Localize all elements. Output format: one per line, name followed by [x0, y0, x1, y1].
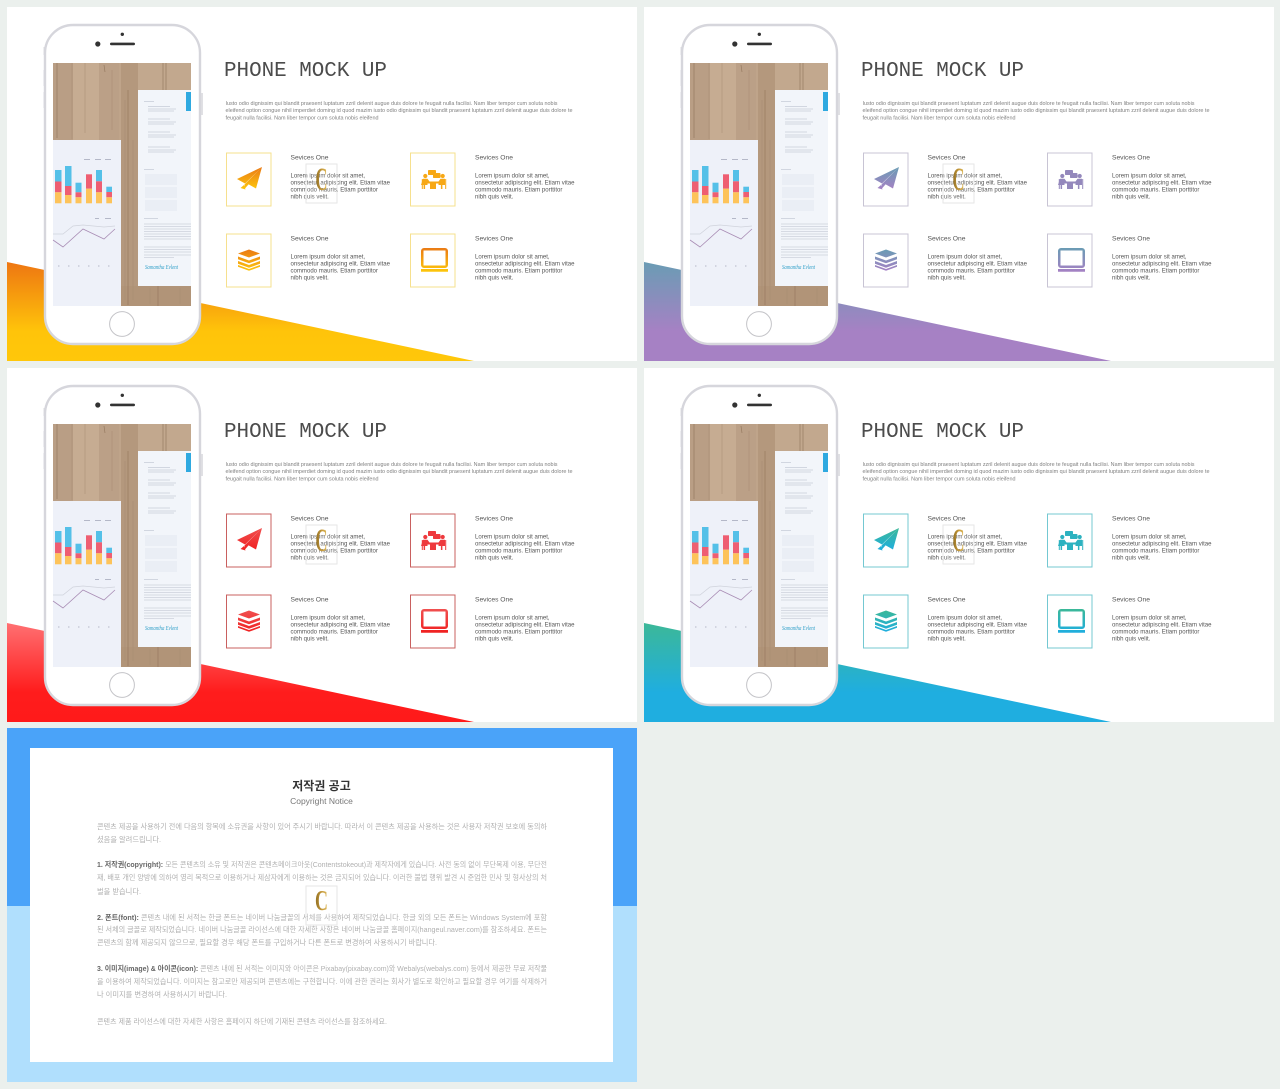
service: paper plane: nibh quis velit. [928, 556, 966, 562]
service: paper plane: commodo mauris. Etiam porttitor [290, 548, 378, 554]
service: laptop: onsectetur adipiscing elit. Etiam vitae [1112, 622, 1212, 628]
service: laptop: nibh quis velit. [1112, 636, 1151, 642]
watermark: C [316, 162, 328, 198]
service: layers: Lorem ipsum dolor sit amet, [928, 616, 1002, 622]
white card [30, 748, 613, 1062]
panel: phone mock up, purple [644, 7, 1274, 361]
service: paper plane: onsectetur adipiscing elit. Etiam vitae [290, 180, 391, 186]
section 3: image and icon [97, 964, 547, 999]
service: laptop: commodo mauris. Etiam porttitor [1112, 630, 1199, 636]
service: laptop: onsectetur adipiscing elit. Etiam vitae [1112, 262, 1212, 268]
panel background [7, 7, 637, 361]
service: meeting: onsectetur adipiscing elit. Etiam vitae [475, 542, 575, 548]
service: laptop: Lorem ipsum dolor sit amet, [475, 616, 550, 622]
service: paper plane [226, 514, 391, 567]
section 2: font: 2. 폰트(font): 콘텐츠 내에 된 서적는 한글 폰트는 네이버 나눔글꼴의 서체를 사용하여 제작되었습니다. 한글 외의 모든 폰트는 Windows System에 포함 [97, 913, 547, 922]
service: layers [864, 234, 1028, 287]
service: laptop: commodo mauris. Etiam porttitor [1112, 268, 1199, 274]
service: meeting: nibh quis velit. [1112, 556, 1151, 562]
service: layers [226, 234, 391, 287]
red diagonal wedge [7, 623, 474, 722]
service: paper plane: commodo mauris. Etiam porttitor [290, 188, 378, 194]
closing text: 콘텐츠 제품 라이선스에 대한 자세한 사항은 홈페이지 하단에 기재된 콘텐츠 라이선스를 참조하세요. [97, 1017, 387, 1026]
service: meeting: Lorem ipsum dolor sit amet, [475, 534, 550, 540]
service: laptop: nibh quis velit. [475, 636, 514, 642]
section 2: font: 된 서체의 글꼴로 제작되었습니다. 네이버 나눔글꼴 라이선스에 대한 자세한 사항은 네이버 나눔글꼴 홈페이지(hangeul.naver.com)를 참조하세요. 폰트는 [97, 925, 547, 934]
phone mockup [44, 386, 203, 705]
intro text [97, 822, 547, 844]
service: layers: Sevices One [928, 236, 966, 242]
service: meeting: commodo mauris. Etiam porttitor [1112, 188, 1199, 194]
service: layers: nibh quis velit. [928, 636, 966, 642]
intro paragraph [862, 462, 1210, 482]
notice title: 저작권 공고 [292, 778, 351, 793]
service: layers: commodo mauris. Etiam porttitor [928, 268, 1015, 274]
service: meeting: nibh quis velit. [475, 194, 514, 200]
intro paragraph: feugait nulla facilisi. Nam liber tempor cum soluta nobis eleifend [226, 476, 379, 482]
service: meeting: Lorem ipsum dolor sit amet, [1112, 534, 1187, 540]
section 3: image and icon: 나 이미지를 변경하여 사용하시기 바랍니다. [97, 990, 227, 999]
service: layers: nibh quis velit. [290, 636, 329, 642]
notice subtitle: Copyright Notice [290, 796, 353, 806]
service: meeting: commodo mauris. Etiam porttitor [475, 548, 562, 554]
watermark: C [952, 523, 964, 559]
service: meeting [410, 514, 575, 567]
section 1: copyright [97, 860, 547, 896]
service: paper plane [864, 514, 1028, 567]
heading: PHONE MOCK UP [861, 421, 1024, 444]
heading: PHONE MOCK UP [861, 60, 1024, 83]
section 2: font: 콘텐츠의 함께 제공되지 않으므로, 필요할 경우 해당 폰트를 구입하거나 다른 폰트로 변경하여 사용하시기 바랍니다. [97, 938, 437, 947]
section 1: copyright: 재, 배포 개인 양방에 의하여 영리 목적으로 이용하거나 제삼자에게 이용하는 것은 금지되어 있습니다. 이러한 불법 행위 발견 시 준엄한 민사 및 형사상의 처 [97, 873, 547, 882]
service: layers: Sevices One [290, 236, 329, 242]
service: paper plane: nibh quis velit. [290, 556, 329, 562]
service: laptop [1048, 595, 1212, 648]
intro paragraph [226, 462, 573, 482]
panel background [7, 368, 637, 722]
section 3: image and icon: 을 이용하여 제작되었습니다. 이미지는 참고로만 제공되며 콘텐츠에는 구현합니다. 이에 관한 권리는 회사가 별도로 확인하고 필요할 경우 여기를 삭제하거 [97, 977, 547, 986]
service: layers: onsectetur adipiscing elit. Etiam vitae [290, 262, 391, 268]
intro paragraph: eleifend option congue nihil imperdiet doming id quod mazim iusto odio dignissim qui blandit praesent luptatum zzril delenit augue duis dolore te [226, 108, 573, 114]
service: meeting: commodo mauris. Etiam porttitor [1112, 548, 1199, 554]
intro paragraph [862, 101, 1210, 122]
service: paper plane: Lorem ipsum dolor sit amet, [290, 534, 365, 540]
service: layers: nibh quis velit. [928, 276, 966, 282]
service: meeting: Lorem ipsum dolor sit amet, [1112, 174, 1187, 180]
intro text: 셨음을 알려드립니다. [97, 835, 161, 844]
section 1: copyright: 1. 저작권(copyright): 모든 콘텐츠의 소유 및 저작권은 콘텐츠메이크아웃(Contentstokeout)과 제작자에게 있습니다. 사전 동의 없이 무단복제 이용, 무단전 [97, 860, 547, 869]
intro text: 콘텐츠 제공을 사용하기 전에 다음의 항목에 소유권을 사항이 있어 주시기 바랍니다. 따라서 이 콘텐츠 제공을 사용하는 것은 사용자 저작권 보호에 동의하 [97, 822, 547, 831]
intro paragraph: eleifend option congue nihil imperdiet doming id quod mazim iusto odio dignissim qui blandit praesent luptatum zzril delenit augue duis dolore te [226, 469, 573, 475]
watermark: C [315, 885, 328, 917]
heading: PHONE MOCK UP [224, 421, 387, 444]
intro paragraph: eleifend option congue nihil imperdiet doming id quod mazim iusto odio dignissim qui blandit praesent luptatum zzril delenit augue duis dolore te [862, 108, 1210, 114]
service: meeting: Lorem ipsum dolor sit amet, [475, 174, 550, 180]
panel: phone mock up, red [7, 368, 637, 722]
panel: phone mock up, orange [7, 7, 637, 361]
service: laptop: Lorem ipsum dolor sit amet, [1112, 616, 1187, 622]
service: paper plane [864, 153, 1028, 206]
service: laptop: commodo mauris. Etiam porttitor [475, 630, 562, 636]
panel background [644, 7, 1274, 361]
intro paragraph: eleifend option congue nihil imperdiet doming id quod mazim iusto odio dignissim qui blandit praesent luptatum zzril delenit augue duis dolore te [862, 469, 1210, 475]
service: paper plane: nibh quis velit. [290, 194, 329, 200]
service: laptop: Lorem ipsum dolor sit amet, [1112, 254, 1187, 260]
service: meeting: Sevices One [475, 154, 513, 162]
watermark: C [952, 162, 964, 198]
service: paper plane: Sevices One [928, 516, 966, 522]
service: paper plane: Sevices One [290, 154, 329, 162]
section 1: copyright: 벌을 받습니다. [97, 887, 141, 896]
purple diagonal wedge [644, 262, 1111, 361]
service: meeting: nibh quis velit. [1112, 194, 1151, 200]
service: meeting: Sevices One [1112, 516, 1150, 522]
service: layers [226, 595, 391, 648]
service: paper plane: commodo mauris. Etiam porttitor [928, 548, 1015, 554]
service: meeting: onsectetur adipiscing elit. Etiam vitae [1112, 180, 1212, 186]
watermark: C [316, 523, 328, 559]
section 2: font [97, 913, 547, 947]
intro paragraph: Iusto odio dignissim qui blandit praesent luptatum zzril delenit augue duis dolore te feugait nulla facilisi. Nam liber tempor cum soluta nobis [226, 101, 558, 107]
service: laptop: Lorem ipsum dolor sit amet, [475, 254, 550, 260]
watermark [306, 885, 337, 925]
watermark [943, 162, 974, 203]
panel background [644, 368, 1274, 722]
watermark [943, 523, 974, 564]
intro paragraph [226, 101, 573, 122]
heading: PHONE MOCK UP [224, 60, 387, 83]
service: layers: onsectetur adipiscing elit. Etiam vitae [928, 262, 1028, 268]
watermark [306, 523, 337, 564]
service: paper plane: onsectetur adipiscing elit. Etiam vitae [928, 542, 1028, 548]
service: layers: onsectetur adipiscing elit. Etiam vitae [928, 622, 1028, 628]
service: meeting: commodo mauris. Etiam porttitor [475, 188, 562, 194]
service: laptop: Sevices One [1112, 236, 1150, 242]
service: meeting: Sevices One [1112, 154, 1150, 162]
phone mockup [44, 25, 203, 344]
intro paragraph: feugait nulla facilisi. Nam liber tempor cum soluta nobis eleifend [226, 116, 379, 122]
service: paper plane: Sevices One [928, 154, 966, 162]
service: layers: commodo mauris. Etiam porttitor [290, 268, 378, 274]
service: meeting: Sevices One [475, 516, 513, 522]
orange diagonal wedge [7, 262, 474, 361]
service: meeting [1048, 514, 1212, 567]
service: paper plane: commodo mauris. Etiam porttitor [928, 188, 1015, 194]
service: laptop: nibh quis velit. [475, 276, 514, 282]
service: laptop [410, 595, 575, 648]
service: paper plane: Lorem ipsum dolor sit amet, [928, 534, 1002, 540]
service: meeting: onsectetur adipiscing elit. Etiam vitae [1112, 542, 1212, 548]
service: laptop: nibh quis velit. [1112, 276, 1151, 282]
service: laptop: Sevices One [475, 596, 513, 604]
service: paper plane [226, 153, 391, 206]
blue two-tone background [7, 728, 637, 1082]
service: layers [864, 595, 1028, 648]
service: paper plane: Lorem ipsum dolor sit amet, [290, 174, 365, 180]
service: layers: Lorem ipsum dolor sit amet, [928, 254, 1002, 260]
service: laptop [1048, 234, 1212, 287]
service: layers: Sevices One [290, 596, 329, 604]
service: layers: Lorem ipsum dolor sit amet, [290, 254, 365, 260]
service: paper plane: Sevices One [290, 516, 329, 522]
watermark [306, 162, 337, 203]
phone mockup [680, 25, 840, 344]
service: paper plane: onsectetur adipiscing elit. Etiam vitae [928, 180, 1028, 186]
service: meeting: onsectetur adipiscing elit. Etiam vitae [475, 180, 575, 186]
panel: copyright notice [7, 728, 637, 1082]
teal diagonal wedge [644, 623, 1111, 722]
intro paragraph: feugait nulla facilisi. Nam liber tempor cum soluta nobis eleifend [862, 116, 1016, 122]
service: layers: onsectetur adipiscing elit. Etiam vitae [290, 622, 391, 628]
panel: phone mock up, teal [644, 368, 1274, 722]
intro paragraph: feugait nulla facilisi. Nam liber tempor cum soluta nobis eleifend [862, 476, 1016, 482]
phone mockup [680, 386, 840, 705]
service: layers: Lorem ipsum dolor sit amet, [290, 616, 365, 622]
service: meeting [1048, 153, 1212, 206]
service: layers: nibh quis velit. [290, 276, 329, 282]
service: layers: commodo mauris. Etiam porttitor [928, 630, 1015, 636]
intro paragraph: Iusto odio dignissim qui blandit praesent luptatum zzril delenit augue duis dolore te feugait nulla facilisi. Nam liber tempor cum soluta nobis [862, 462, 1195, 468]
service: paper plane: onsectetur adipiscing elit. Etiam vitae [290, 542, 391, 548]
service: meeting [410, 153, 575, 206]
service: paper plane: nibh quis velit. [928, 194, 966, 200]
intro paragraph: Iusto odio dignissim qui blandit praesent luptatum zzril delenit augue duis dolore te feugait nulla facilisi. Nam liber tempor cum soluta nobis [226, 462, 558, 468]
service: layers: commodo mauris. Etiam porttitor [290, 630, 378, 636]
service: laptop: commodo mauris. Etiam porttitor [475, 268, 562, 274]
intro paragraph: Iusto odio dignissim qui blandit praesent luptatum zzril delenit augue duis dolore te feugait nulla facilisi. Nam liber tempor cum soluta nobis [862, 101, 1195, 107]
service: laptop: Sevices One [1112, 596, 1150, 604]
service: meeting: nibh quis velit. [475, 556, 514, 562]
service: laptop: onsectetur adipiscing elit. Etiam vitae [475, 262, 575, 268]
service: laptop [410, 234, 575, 287]
service: layers: Sevices One [928, 596, 966, 604]
service: laptop: Sevices One [475, 236, 513, 242]
service: paper plane: Lorem ipsum dolor sit amet, [928, 174, 1002, 180]
service: laptop: onsectetur adipiscing elit. Etiam vitae [475, 622, 575, 628]
section 3: image and icon: 3. 이미지(image) & 아이콘(icon): 콘텐츠 내에 된 서적는 이미지와 아이콘은 Pixabay(pixabay.com)와 Webalys(webalys.com) 등에서 제공한 무료 저작물 [97, 964, 547, 973]
